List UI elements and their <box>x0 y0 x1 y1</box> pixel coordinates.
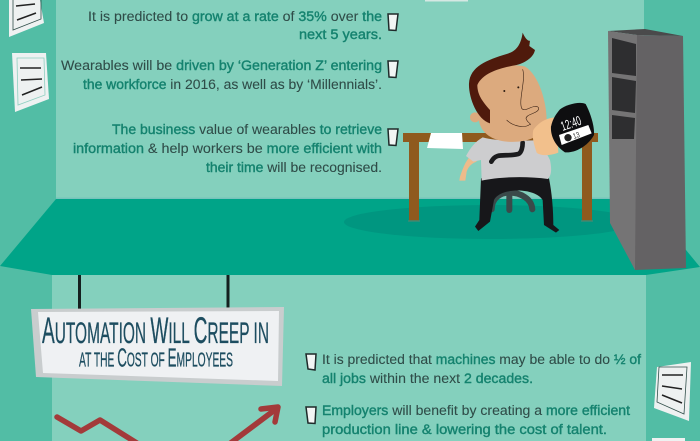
paper: top centre <box>425 0 468 2</box>
floor <box>0 199 700 275</box>
text block: employers <box>322 403 630 437</box>
text block: business value: The business value of wearables to retrieve <box>112 122 382 137</box>
text block: machines <box>322 352 641 386</box>
hanging rods <box>80 275 228 309</box>
smartwatch <box>551 103 594 152</box>
tie <box>491 143 523 162</box>
hair <box>469 33 535 123</box>
text block: machines: It is predicted that machines may be able to do ½ of <box>322 352 641 367</box>
raised forearm <box>533 117 558 155</box>
text block: generation z <box>61 58 382 92</box>
sign: automation heading: AT THE COST OF EMPLOYEES <box>79 342 233 372</box>
trousers <box>475 176 559 233</box>
smartwatch: 13 <box>572 130 581 141</box>
text block: growth: next 5 years. <box>299 27 382 42</box>
text block: generation z: the workforce in 2016, as well as by ‘Millennials’. <box>83 77 382 92</box>
text block: business value: their time will be recognised. <box>206 160 382 175</box>
smartwatch: 12:40 <box>559 113 583 134</box>
left arm <box>459 153 477 181</box>
paper: bottom right <box>652 438 685 441</box>
checkbox icons: bottom list <box>306 354 316 424</box>
sign: automation heading: AUTOMATION WILL CREEP IN <box>42 310 269 351</box>
checkbox icons: top list <box>388 14 398 146</box>
face lines <box>507 69 539 126</box>
desk and man shadow <box>344 205 636 239</box>
man looking at smartwatch <box>459 33 594 233</box>
skirting line <box>56 198 644 199</box>
text block: employers: production line & lowering the cost of talent. <box>322 422 607 437</box>
red trend arrow <box>57 407 278 441</box>
text block: growth: It is predicted to grow at a rate of 35% over the <box>88 9 382 24</box>
ear <box>470 112 480 122</box>
text block: generation z: Wearables will be driven by ‘Generation Z’ entering <box>61 58 382 73</box>
text block: business value: information & help workers be more efficient with <box>73 141 382 156</box>
desk <box>403 133 598 221</box>
text block: growth <box>88 9 382 42</box>
paper: top left <box>9 0 44 37</box>
text block: machines: all jobs within the next 2 decades. <box>322 371 533 386</box>
paper: right <box>654 362 691 421</box>
shirt <box>466 137 551 181</box>
text block: employers: Employers will benefit by creating a more efficient <box>322 403 630 418</box>
paper: middle left <box>12 53 49 112</box>
bookcase <box>608 29 686 270</box>
sign: automation heading <box>31 307 284 386</box>
chair <box>492 193 532 210</box>
text block: business value <box>73 122 382 175</box>
head <box>474 65 547 142</box>
